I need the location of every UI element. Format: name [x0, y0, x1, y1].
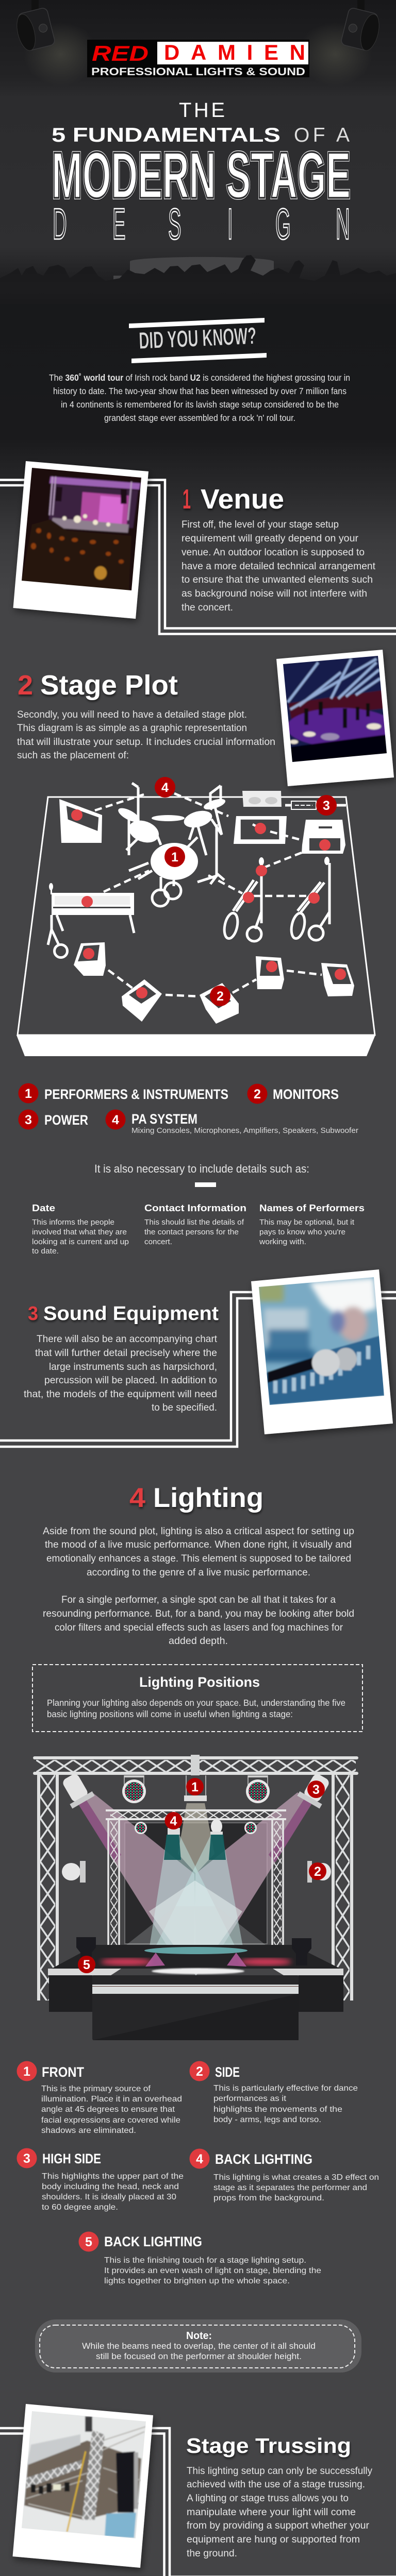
- item: side: highlights the movements of the: [213, 2105, 342, 2114]
- column: date: looking at is current and up: [32, 1238, 129, 1246]
- column: names of performers: [259, 1202, 365, 1246]
- heading: 2 stage plot: Stage Plot: [40, 670, 178, 701]
- text: sound equipment body: that, the models of the equipment will need: [24, 1388, 217, 1400]
- text: lighting body: resounding performance. But, for a band, you may be looking after bold: [43, 1608, 354, 1619]
- text: venue body: venue. An outdoor location is supposed to: [182, 547, 365, 558]
- column: names of performers: working with.: [259, 1238, 306, 1246]
- text: sound equipment body: percussion will be placed. In addition to: [44, 1375, 217, 1386]
- badge: rig 3: 3: [312, 1783, 320, 1797]
- text: venue body: [182, 519, 376, 613]
- inner truss: [106, 1809, 286, 1945]
- column: names of performers: This may be optional, but it: [259, 1218, 354, 1227]
- item: back lighting: BACK LIGHTING: [215, 2151, 312, 2167]
- callout: note: still be focused on the performer at shoulder height.: [96, 2351, 302, 2361]
- text: lighting body: according to the genre of a live music performance.: [87, 1567, 310, 1578]
- heading: 2 stage plot: 2: [18, 670, 33, 701]
- title: THE: [179, 99, 225, 122]
- title: E: [112, 199, 126, 248]
- callout: lighting positions: basic lighting positions will come in useful when lighting a stage:: [47, 1709, 293, 1719]
- item: front: angle at 45 degrees to ensure that: [41, 2105, 175, 2114]
- icon: floor monitors: [74, 942, 354, 1024]
- text: U2 fact: The 360˚ world tour of Irish rock band U2 is considered the highest grossing tour in: [49, 372, 350, 383]
- icon: left spotlight: [13, 0, 98, 86]
- diagram: lighting rig: [33, 1755, 358, 2040]
- text: stage trussing body: manipulate where your light will come: [187, 2506, 356, 2518]
- diagram: stage plot: [16, 777, 375, 1056]
- column: contact information: This should list the details of: [144, 1218, 244, 1227]
- illustration: podium and crowd: [0, 255, 396, 304]
- item: side: performances as it: [213, 2094, 287, 2103]
- title: D: [53, 199, 67, 248]
- text: lighting body: For a single performer, a single spot can be all that it takes for a: [61, 1594, 336, 1605]
- icon: drum kit: [116, 783, 226, 906]
- photo: truss on site: [12, 2404, 153, 2568]
- item: front: FRONT: [42, 2064, 84, 2080]
- frame lines: [0, 2428, 396, 2576]
- text: venue body: First off, the level of your stage setup: [182, 519, 339, 530]
- heading: did you know: [129, 318, 267, 363]
- item: back lighting finishing touch: 5: [85, 2235, 92, 2249]
- column: date: Date: [32, 1202, 55, 1213]
- badge: rig 2: [309, 1862, 326, 1880]
- text: lighting body: the mood of a live music performance. When done right, it visually and: [45, 1539, 352, 1550]
- text: details intro: [94, 1162, 309, 1187]
- icon: ground lights: [76, 1937, 311, 1965]
- item: front: illumination. Place it in an overhead: [41, 2095, 182, 2104]
- badge: rig 1: [186, 1778, 204, 1795]
- text: stage trussing body: A lighting or stage truss allows you to: [187, 2493, 349, 2504]
- item: high side: HIGH SIDE: [42, 2151, 101, 2166]
- column: date: [32, 1202, 129, 1256]
- item: side: body - arms, legs and torso.: [213, 2115, 321, 2124]
- text: sound equipment body: There will also be an accompanying chart: [37, 1333, 218, 1345]
- item: high side: shoulders. It is ideally placed at 30: [42, 2193, 176, 2201]
- icon: right spotlight: [298, 0, 383, 86]
- text: venue body: have a more detailed technical arrangement: [182, 561, 376, 572]
- item: back lighting finishing touch: This is the finishing touch for a stage lighting setup.: [104, 2256, 306, 2265]
- panel: 3 sound equipment: [0, 1269, 396, 1447]
- badge: rig 1: 1: [191, 1780, 199, 1794]
- legend item 1: PERFORMERS & INSTRUMENTS: [44, 1087, 228, 1102]
- badge: 4 PA system: 4: [161, 781, 169, 795]
- title: G: [275, 199, 291, 248]
- text: stage plot body: that will illustrate your setup. It includes crucial information: [17, 736, 275, 748]
- item: back lighting finishing touch: lights together to brighten up the whole space.: [104, 2277, 290, 2285]
- icon: keyboard and player: [48, 883, 134, 957]
- outer truss: [33, 1755, 358, 2001]
- logo: Red Damien: PROFESSIONAL LIGHTS & SOUND: [91, 66, 305, 78]
- item: back lighting: stage as it separates the performer and: [213, 2183, 367, 2192]
- title: OF A: [294, 124, 350, 146]
- callout: lighting positions: Planning your lighting also depends on your space. But, understanding the five: [47, 1698, 345, 1708]
- column: contact information: Contact Information: [144, 1202, 246, 1213]
- callout: note: Note:: [186, 2330, 212, 2342]
- panel: header: [0, 0, 396, 304]
- stage floor: [48, 1945, 343, 2040]
- column: contact information: [144, 1202, 246, 1246]
- legend item 2: MONITORS: [273, 1087, 339, 1102]
- light beams: [78, 1792, 311, 1976]
- title: [52, 99, 351, 248]
- legend item 4: [105, 1110, 358, 1135]
- text: U2 fact: history to date. The two-year show that has been witnessed by over 7 million fans: [53, 386, 346, 396]
- badge: 2 monitors: 2: [217, 989, 224, 1004]
- legend item 2: [248, 1084, 339, 1104]
- item: front: [16, 2061, 182, 2135]
- badge: rig 5: [78, 1956, 95, 1973]
- item: side: [190, 2061, 358, 2124]
- legend item 2: 2: [254, 1087, 261, 1101]
- legend item 4: 4: [112, 1113, 119, 1127]
- icon: guitarists: [222, 857, 329, 941]
- text: lighting body: color filters and special effects such as lasers and fog machines for: [55, 1622, 343, 1633]
- item: high side: 3: [23, 2151, 30, 2166]
- item: side: SIDE: [215, 2064, 240, 2080]
- text: stage plot body: such as the placement of:: [17, 750, 129, 761]
- item: high side: [16, 2148, 184, 2212]
- text: U2 fact: in 4 continents is remembered for its lavish stage setup considered to be the: [61, 399, 339, 410]
- column: date: involved that what they are: [32, 1228, 127, 1236]
- text: sound equipment body: that will further detail precisely where the: [35, 1347, 217, 1359]
- text: sound equipment body: large instruments such as harpsichord,: [49, 1361, 217, 1372]
- text: stage trussing body: equipment are hung or supported from: [187, 2534, 360, 2545]
- logo: Red Damien: RED: [92, 41, 148, 65]
- backdrop screen: [125, 1823, 267, 1944]
- panel: did you know: [49, 318, 350, 423]
- badge: 4 PA system: [155, 777, 175, 798]
- text: stage trussing body: achieved with the use of a stage trussing.: [187, 2479, 365, 2490]
- text: lighting body: [43, 1526, 354, 1647]
- panel: 4 lighting: [16, 1483, 379, 2372]
- item: back lighting: This lighting is what creates a 3D effect on: [213, 2173, 379, 2182]
- text: lighting body: added depth.: [169, 1635, 228, 1647]
- badge: rig 2: 2: [314, 1865, 321, 1879]
- text: sound equipment body: to be specified.: [152, 1402, 217, 1413]
- photo: stage beams: [276, 650, 395, 786]
- legend item 3: POWER: [44, 1112, 88, 1128]
- callout: note: While the beams need to overlap, the center of it all should: [82, 2341, 316, 2351]
- text: U2 fact: [49, 372, 350, 423]
- item: high side: body including the head, neck and: [42, 2182, 179, 2191]
- red markers: [71, 809, 346, 998]
- badge: rig 3: [307, 1781, 325, 1798]
- heading: 4 lighting: Lighting: [153, 1483, 263, 1513]
- text: venue body: as background noise will not interfere with: [182, 588, 367, 599]
- icon: rig lights: [58, 1770, 334, 1883]
- item: front: facial expressions are covered while: [41, 2116, 180, 2125]
- text: stage plot body: [17, 709, 275, 761]
- item: high side: This highlights the upper part of the: [42, 2172, 184, 2181]
- callout: note: [35, 2319, 361, 2372]
- callout: lighting positions: [32, 1665, 362, 1732]
- legend item 3: 3: [25, 1113, 32, 1127]
- text: stage plot body: This diagram is as simple as a graphic representation: [17, 722, 247, 734]
- legend item 3: [19, 1110, 88, 1129]
- text: stage trussing body: the ground.: [187, 2548, 237, 2559]
- badge: 3 power: [316, 795, 337, 816]
- heading: did you know: DID YOU KNOW?: [138, 322, 257, 354]
- text: details intro: It is also necessary to include details such as:: [94, 1162, 309, 1175]
- badge: rig 4: [165, 1812, 183, 1829]
- badge: 2 monitors: [210, 986, 230, 1006]
- column: date: to date.: [32, 1247, 59, 1256]
- item: side: 2: [196, 2064, 203, 2079]
- photo: concert venue: [13, 461, 150, 619]
- heading: 4 lighting: 4: [129, 1483, 146, 1513]
- text: sound equipment body: [24, 1333, 218, 1413]
- legend item 1: 1: [25, 1087, 32, 1101]
- icon: power and monitor stack: [234, 791, 345, 854]
- heading: 3 sound equipment: Sound Equipment: [43, 1303, 219, 1325]
- signal paths: [95, 793, 346, 996]
- text: U2 fact: grandest stage ever assembled for a rock 'n' roll tour.: [104, 413, 295, 423]
- item: back lighting: 4: [196, 2152, 203, 2166]
- text: stage trussing body: from by providing a support whether your: [187, 2520, 369, 2531]
- column: contact information: the contact persons for the: [144, 1228, 239, 1236]
- column: names of performers: Names of Performers: [259, 1202, 365, 1213]
- item: front: This is the primary source of: [41, 2084, 151, 2093]
- heading: 3 sound equipment: 3: [28, 1303, 38, 1325]
- photo: mixing desk: [251, 1269, 393, 1434]
- icon: PA speaker left: [59, 799, 102, 843]
- badge: 1 performers: 1: [171, 850, 178, 865]
- text: stage plot body: Secondly, you will need to have a detailed stage plot.: [17, 709, 247, 720]
- text: lighting body: emotionally enhances a stage. This element is supposed to be tailored: [46, 1553, 351, 1564]
- legend item 4: Mixing Consoles, Microphones, Amplifiers, Speakers, Subwoofer: [131, 1127, 358, 1135]
- text: venue body: requirement will greatly depend on your: [182, 533, 358, 544]
- item: back lighting: props from the background.: [213, 2194, 324, 2202]
- item: back lighting finishing touch: BACK LIGHTING: [104, 2234, 202, 2249]
- column: names of performers: pays to know who you're: [259, 1228, 345, 1236]
- item: front: shadows are eliminated.: [41, 2126, 136, 2135]
- logo: Red Damien: [87, 40, 309, 78]
- frame lines: [0, 480, 396, 634]
- item: back lighting: [190, 2148, 379, 2202]
- text: venue body: to ensure that the unwanted elements such: [182, 574, 373, 585]
- frame lines: [0, 1292, 396, 1447]
- legend item 1: [19, 1083, 228, 1104]
- heading: stage trussing: Stage Trussing: [186, 2434, 351, 2458]
- item: side: This is particularly effective for dance: [213, 2084, 358, 2093]
- panel: 1 venue: [0, 461, 396, 634]
- legend item 4: PA SYSTEM: [131, 1111, 197, 1127]
- column: date: This informs the people: [32, 1218, 114, 1227]
- callout: lighting positions: Lighting Positions: [139, 1674, 260, 1690]
- text: stage trussing body: This lighting setup can only be successfully: [187, 2465, 372, 2477]
- badge: 3 power: 3: [323, 799, 330, 813]
- title: I: [227, 199, 233, 248]
- panel: stage trussing: [0, 2404, 396, 2576]
- badge: rig 4: 4: [170, 1814, 177, 1828]
- column: contact information: concert.: [144, 1238, 172, 1246]
- item: back lighting finishing touch: [78, 2232, 321, 2285]
- badge: rig 5: 5: [83, 1958, 90, 1972]
- legend: stage plot: [19, 1083, 358, 1135]
- item: high side: to 60 degree angle.: [42, 2203, 118, 2212]
- text: venue body: the concert.: [182, 602, 233, 613]
- item: back lighting finishing touch: It provides an even wash of light on stage, blending the: [104, 2266, 321, 2275]
- title: S: [168, 199, 182, 248]
- text: lighting body: Aside from the sound plot, lighting is also a critical aspect for setting up: [43, 1526, 354, 1537]
- heading: 1 venue: 1: [183, 484, 191, 515]
- title: 5 FUNDAMENTALS: [52, 124, 280, 146]
- logo: Red Damien: DAMIEN: [164, 40, 305, 64]
- panel: 2 stage plot: [16, 650, 395, 1256]
- item: front: 1: [23, 2064, 30, 2079]
- heading: 1 venue: Venue: [201, 484, 284, 515]
- badge: 1 performers: [164, 846, 185, 867]
- text: stage trussing body: [187, 2465, 372, 2559]
- title: N: [336, 199, 350, 248]
